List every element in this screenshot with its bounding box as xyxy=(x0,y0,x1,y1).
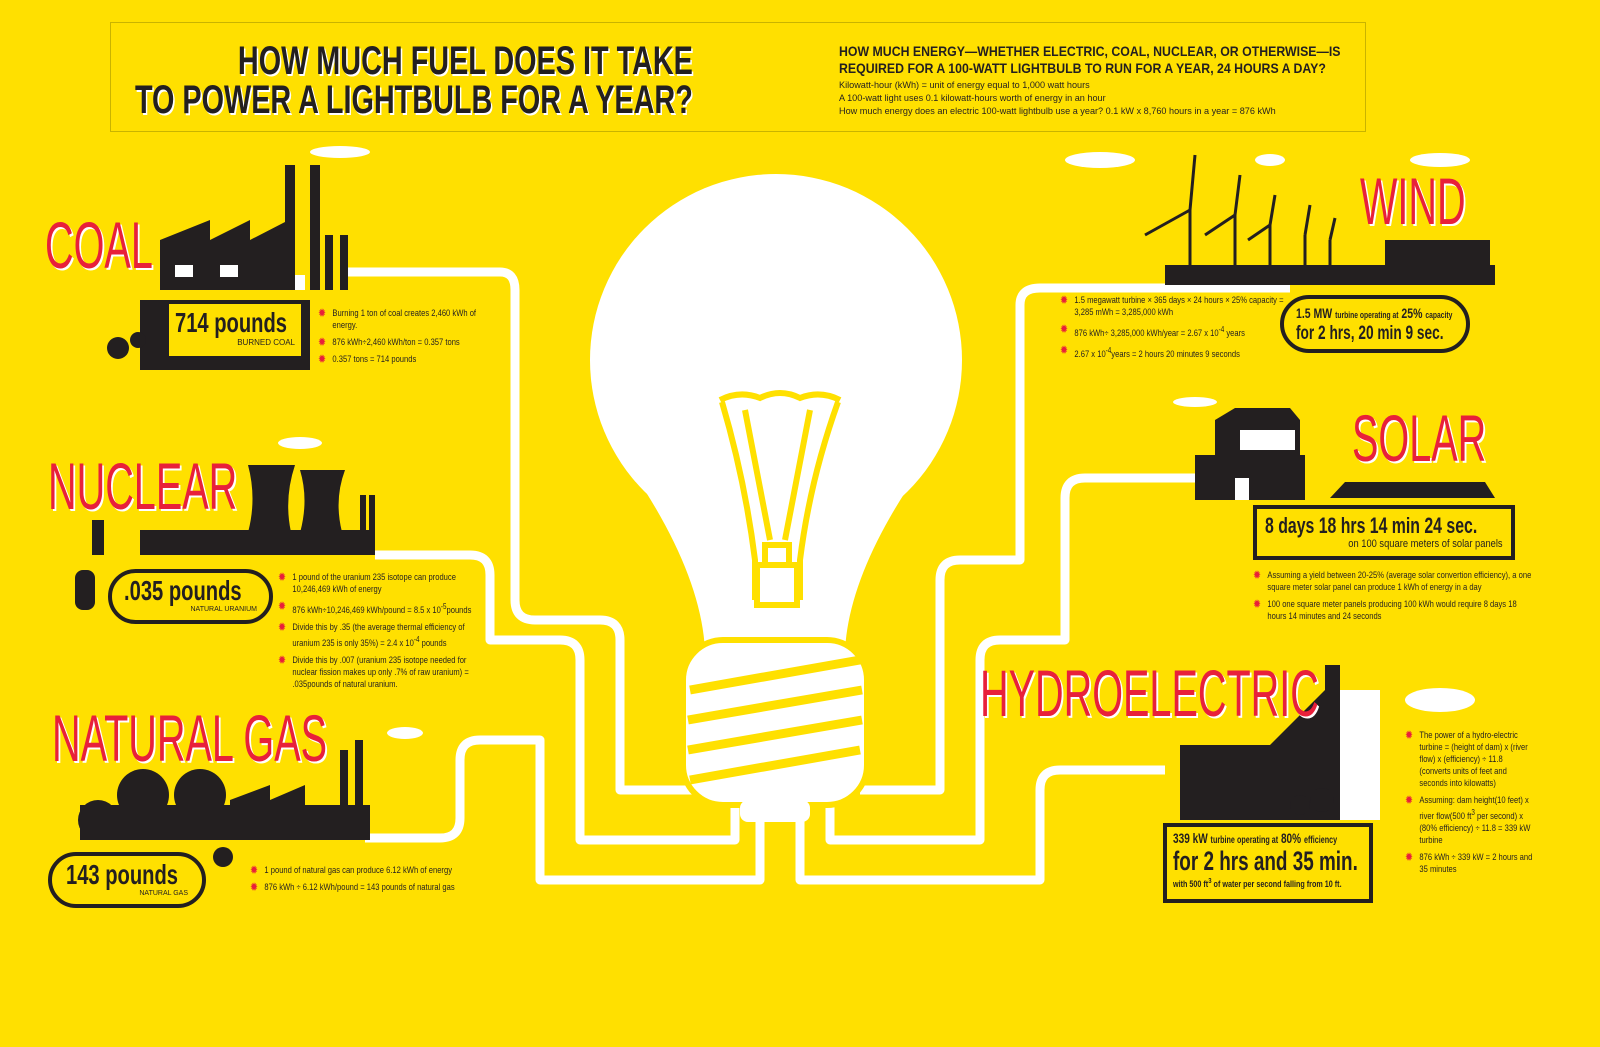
title xyxy=(135,39,694,122)
panel: wind xyxy=(1060,164,1470,360)
value box: wind xyxy=(1280,295,1470,353)
value box: nuclear xyxy=(108,569,273,624)
nuclear icon xyxy=(75,465,375,610)
notes: wind: 876 kWh÷ 3,285,000 kWh/year = 2.67 x 10-4 years xyxy=(1074,325,1245,339)
wind icon xyxy=(1145,155,1495,285)
lightbulb xyxy=(590,174,962,822)
notes: solar: Assuming a yield between 20-25% (average solar convertion efficiency), a one square meter solar panel can produce 1 kWh of energy in a day xyxy=(1267,570,1531,593)
value box: solar: on 100 square meters of solar panels xyxy=(1349,538,1503,550)
heading: nuclear: NUCLEAR xyxy=(48,449,237,523)
value box: wind: 1.5 MW turbine operating at 25% capacity xyxy=(1296,305,1452,321)
hydro icon xyxy=(1180,665,1380,820)
value box: natural gas: 143 pounds xyxy=(66,859,178,890)
title: HOW MUCH FUEL DOES IT TAKE xyxy=(238,39,693,83)
intro text: Kilowatt-hour (kWh) = unit of energy equal to 1,000 watt hours xyxy=(839,80,1090,91)
heading: solar: SOLAR xyxy=(1352,401,1486,475)
value box: natural gas xyxy=(48,852,206,908)
value box: solar: 8 days 18 hrs 14 min 24 sec. xyxy=(1265,513,1477,538)
heading: wind: WIND xyxy=(1360,164,1466,238)
notes: nuclear: 876 kWh÷10,246,469 kWh/pound = 8.5 x 10-5pounds xyxy=(292,602,471,616)
notes: hydroelectric: Assuming: dam height(10 feet) x river flow(500 ft3 per second) x (80% efficiency) ÷ 11.8 = 339 kW turbine xyxy=(1419,795,1530,846)
notes: nuclear: 1 pound of the uranium 235 isotope can produce 10,246,469 kWh of energy xyxy=(292,572,456,595)
value box: hydroelectric: for 2 hrs and 35 min. xyxy=(1173,846,1358,876)
notes: coal: Burning 1 ton of coal creates 2,460 kWh of energy. xyxy=(332,308,476,331)
notes: wind xyxy=(1060,295,1284,360)
intro text: A 100-watt light uses 0.1 kilowatt-hours worth of energy in an hour xyxy=(839,93,1106,104)
panel: hydroelectric xyxy=(980,656,1532,903)
notes: solar: 100 one square meter panels producing 100 kWh would require 8 days 18 hours 14 minutes and 24 seconds xyxy=(1267,599,1517,622)
intro text: How much energy does an electric 100-watt lightbulb use a year? 0.1 kW x 8,760 hours in a year = 876 kWh xyxy=(839,106,1276,117)
intro text: HOW MUCH ENERGY—WHETHER ELECTRIC, COAL, NUCLEAR, OR OTHERWISE—IS xyxy=(839,43,1340,59)
header box xyxy=(110,22,1366,132)
value box: coal: 714 pounds xyxy=(175,307,287,338)
value box: hydroelectric: 339 kW turbine operating at 80% efficiency xyxy=(1173,830,1337,846)
value box: nuclear: .035 pounds xyxy=(124,575,242,606)
panel: nuclear xyxy=(48,449,472,690)
notes: wind: 2.67 x 10-4years = 2 hours 20 minutes 9 seconds xyxy=(1074,346,1240,360)
notes: natural gas: 1 pound of natural gas can produce 6.12 kWh of energy xyxy=(264,865,452,876)
notes: hydroelectric: 876 kWh ÷ 339 kW = 2 hours and 35 minutes xyxy=(1419,852,1532,875)
notes: coal xyxy=(318,308,476,365)
notes: hydroelectric: The power of a hydro-electric turbine = (height of dam) x (river flow) x (efficiency) ÷ 11.8 (converts units of feet and seconds into kilowatts) xyxy=(1419,730,1528,789)
notes: hydroelectric xyxy=(1406,730,1532,875)
natural gas icon xyxy=(78,740,370,867)
value box: nuclear: NATURAL URANIUM xyxy=(190,606,257,613)
value box: wind: for 2 hrs, 20 min 9 sec. xyxy=(1296,323,1444,344)
notes: nuclear: Divide this by .35 (the average thermal efficiency of uranium 235 is only 35%) = 2.4 x 10-4 pounds xyxy=(292,622,465,649)
coal factory icon xyxy=(107,165,348,370)
notes: coal: 0.357 tons = 714 pounds xyxy=(332,354,416,365)
notes: natural gas xyxy=(250,865,455,893)
value box: solar xyxy=(1253,505,1515,560)
notes: nuclear xyxy=(278,572,472,690)
title: TO POWER A LIGHTBULB FOR A YEAR? xyxy=(135,78,693,122)
intro text xyxy=(839,43,1340,117)
intro text: REQUIRED FOR A 100-WATT LIGHTBULB TO RUN FOR A YEAR, 24 HOURS A DAY? xyxy=(839,60,1326,76)
notes: nuclear: Divide this by .007 (uranium 235 isotope needed for nuclear fission makes up only .7% of raw uranium) = .035pounds of natural uranium. xyxy=(292,655,469,690)
heading: natural gas: NATURAL GAS xyxy=(52,701,327,775)
value box: coal: BURNED COAL xyxy=(237,338,295,347)
heading: hydroelectric: HYDROELECTRIC xyxy=(980,656,1319,730)
clouds xyxy=(278,146,1475,739)
value box: hydroelectric xyxy=(1163,823,1373,903)
panel: solar xyxy=(1253,401,1531,622)
heading: coal: COAL xyxy=(45,208,153,282)
panel: natural gas xyxy=(48,701,455,908)
value box: natural gas: NATURAL GAS xyxy=(139,890,188,897)
notes: coal: 876 kWh÷2,460 kWh/ton = 0.357 tons xyxy=(332,337,460,348)
notes: natural gas: 876 kWh ÷ 6.12 kWh/pound = 143 pounds of natural gas xyxy=(264,882,455,893)
value box: hydroelectric: with 500 ft3 of water per second falling from 10 ft. xyxy=(1173,876,1342,889)
panel: coal xyxy=(45,208,476,365)
notes: solar xyxy=(1254,570,1531,622)
solar icon xyxy=(1195,408,1495,500)
value box: coal xyxy=(165,300,305,360)
notes: wind: 1.5 megawatt turbine × 365 days × 24 hours × 25% capacity = 3,285 mWh = 3,285,000 kWh xyxy=(1074,295,1284,318)
